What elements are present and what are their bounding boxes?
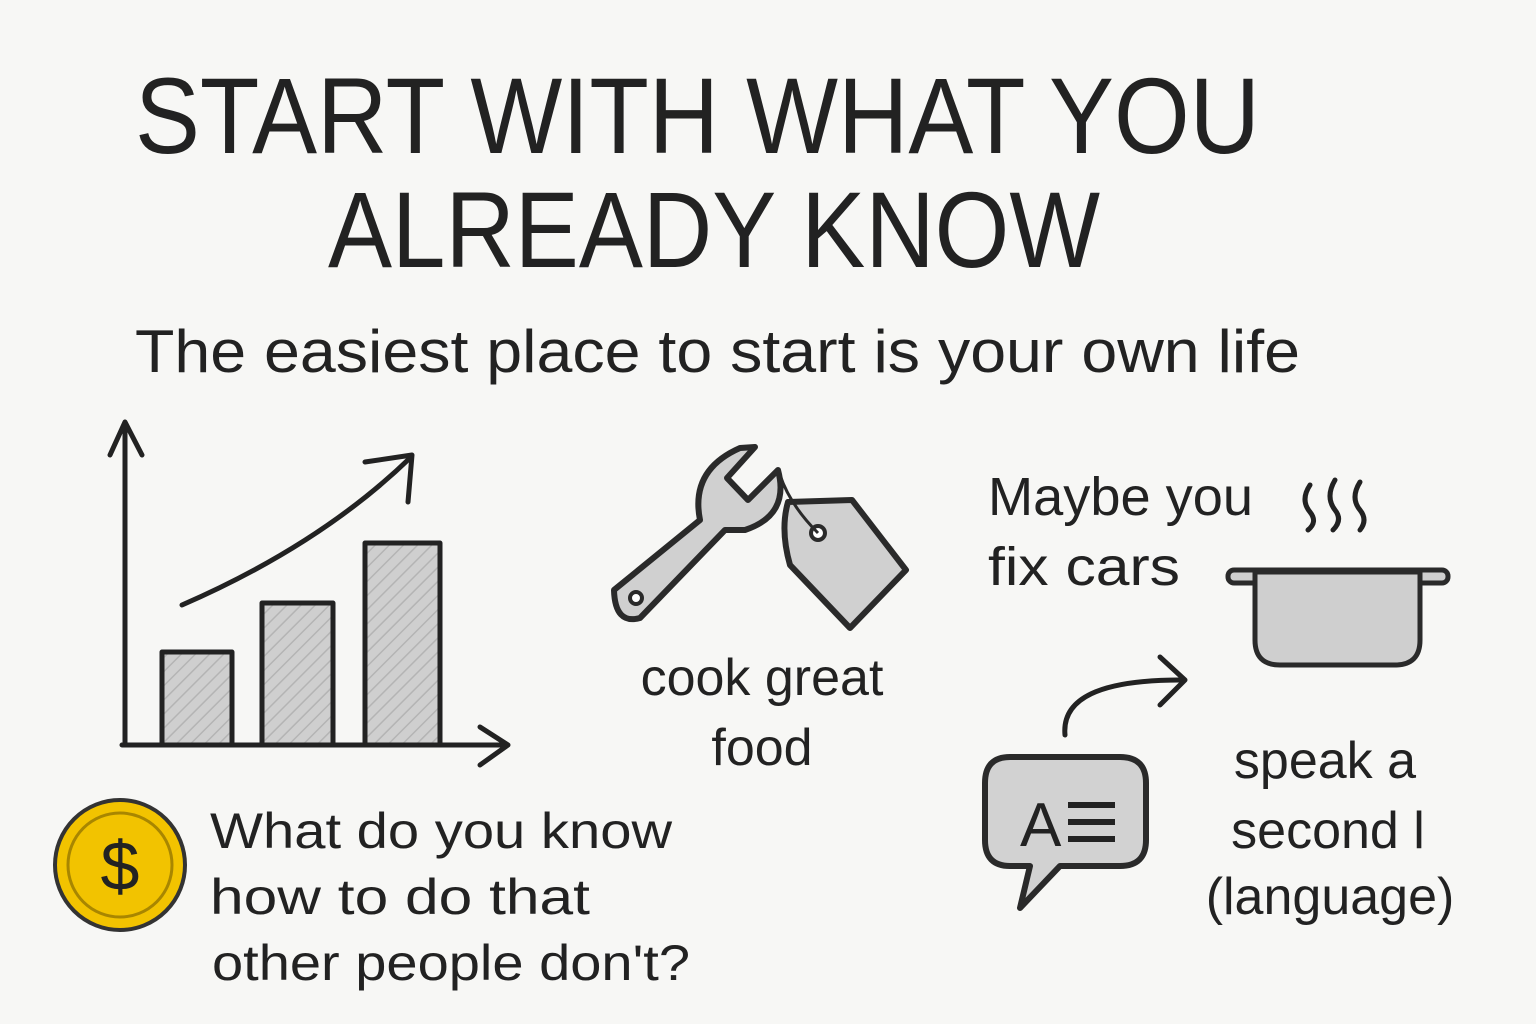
text: question: other people don't? — [212, 935, 690, 991]
icon: wrench and tag — [614, 447, 906, 628]
text: speak a second language — [1206, 732, 1454, 926]
icon: speech bubble — [985, 757, 1146, 908]
text: cook great food: food — [711, 719, 813, 777]
icon: pot — [1228, 570, 1448, 665]
title: ALREADY KNOW — [328, 169, 1100, 290]
text: speak a second language: speak a — [1234, 732, 1416, 790]
text: question: how to do that — [210, 869, 590, 925]
text: fix cars: fix cars — [988, 537, 1180, 597]
icon: coin: $ — [101, 827, 139, 905]
text: cook great food: cook great — [641, 649, 884, 707]
text: fix cars — [988, 467, 1253, 597]
text: speak a second language: (language) — [1206, 868, 1454, 926]
subtitle: The easiest place to start is your own life — [135, 318, 1300, 385]
title — [135, 55, 1260, 290]
icon: coin — [55, 800, 185, 930]
text: speak a second language: second l — [1231, 802, 1425, 860]
icon: steam — [1305, 480, 1364, 530]
text: question — [210, 803, 690, 991]
title: START WITH WHAT YOU — [135, 55, 1260, 176]
text: question: What do you know — [210, 803, 673, 859]
bar chart — [110, 422, 508, 765]
text: fix cars: Maybe you — [988, 467, 1253, 527]
arrow: curved — [1065, 657, 1185, 735]
icon: speech bubble: A — [1020, 791, 1062, 860]
text: cook great food — [641, 649, 884, 777]
